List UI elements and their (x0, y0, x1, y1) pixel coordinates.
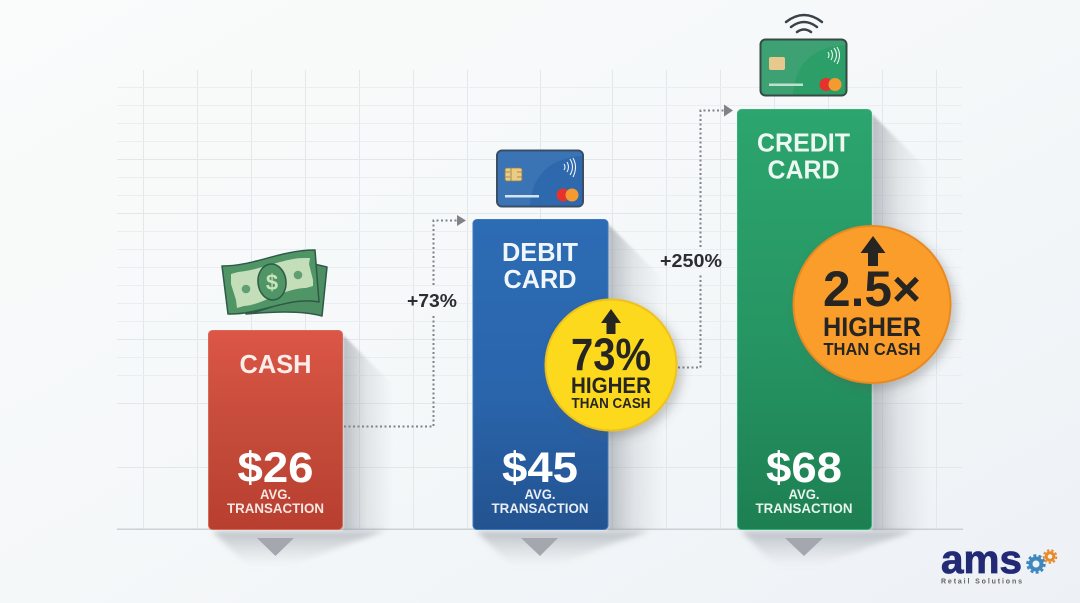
bar shadow (212, 335, 395, 566)
panel: cash bar (208, 330, 395, 566)
chart grid (117, 70, 962, 529)
badge: 2.5x higher: 2.5× (823, 261, 921, 317)
icon: debit card (497, 150, 583, 206)
icon: credit card (760, 40, 846, 96)
value: $68: $68 (766, 444, 842, 492)
caption (492, 486, 588, 516)
arrow: debit to credit (678, 104, 733, 368)
chip (505, 168, 522, 181)
badge: 73% higher (546, 300, 676, 430)
heading: credit card (757, 128, 850, 184)
caption: AVG. (260, 486, 291, 502)
blue bar (473, 220, 608, 530)
logo: AMS Retail Solutions: ams (941, 538, 1022, 582)
heading: credit card: CARD (768, 154, 840, 184)
label: +250%: +250% (660, 251, 722, 271)
green bar (738, 110, 872, 530)
baseline (117, 528, 963, 530)
icon: contactless waves (786, 15, 822, 32)
caption: AVG. (524, 486, 556, 502)
label: +73%: +73% (407, 291, 457, 311)
icon: orange gear (1044, 550, 1056, 563)
red bar (208, 330, 342, 530)
arrow: cash to debit (344, 215, 466, 426)
caption: TRANSACTION (756, 500, 852, 516)
heading: debit card: DEBIT (502, 237, 578, 267)
badge: 2.5x higher: HIGHER (823, 312, 921, 342)
icon: cash bills (222, 250, 327, 316)
icon: cash bills: $ (266, 270, 278, 295)
heading: credit card: CREDIT (757, 128, 850, 158)
value: $45: $45 (502, 444, 578, 492)
pointer (521, 538, 558, 556)
bar shadow (476, 224, 665, 566)
caption: AVG. (788, 486, 820, 502)
heading: debit card: CARD (504, 264, 576, 294)
panel: debit bar (473, 220, 665, 566)
badge: 73% higher: HIGHER (571, 373, 651, 398)
logo: AMS Retail Solutions: Retail Solutions (941, 578, 1022, 586)
pointer (785, 538, 823, 556)
bar shadow (741, 114, 930, 566)
caption (756, 486, 852, 516)
badge: 73% higher: THAN CASH (572, 396, 650, 412)
logo: AMS Retail Solutions (941, 538, 1056, 586)
icon: blue gear (1028, 556, 1044, 572)
caption: TRANSACTION (492, 500, 588, 516)
pointer (257, 538, 294, 556)
value: $26: $26 (238, 444, 314, 492)
heading: debit card (502, 237, 578, 294)
badge: 2.5x higher (794, 226, 950, 383)
badge: 2.5x higher: THAN CASH (824, 339, 920, 359)
caption (227, 486, 324, 516)
heading: cash: CASH (240, 349, 312, 379)
caption: TRANSACTION (227, 500, 324, 516)
panel: credit bar (738, 110, 930, 566)
badge: 73% higher: 73% (571, 329, 651, 380)
